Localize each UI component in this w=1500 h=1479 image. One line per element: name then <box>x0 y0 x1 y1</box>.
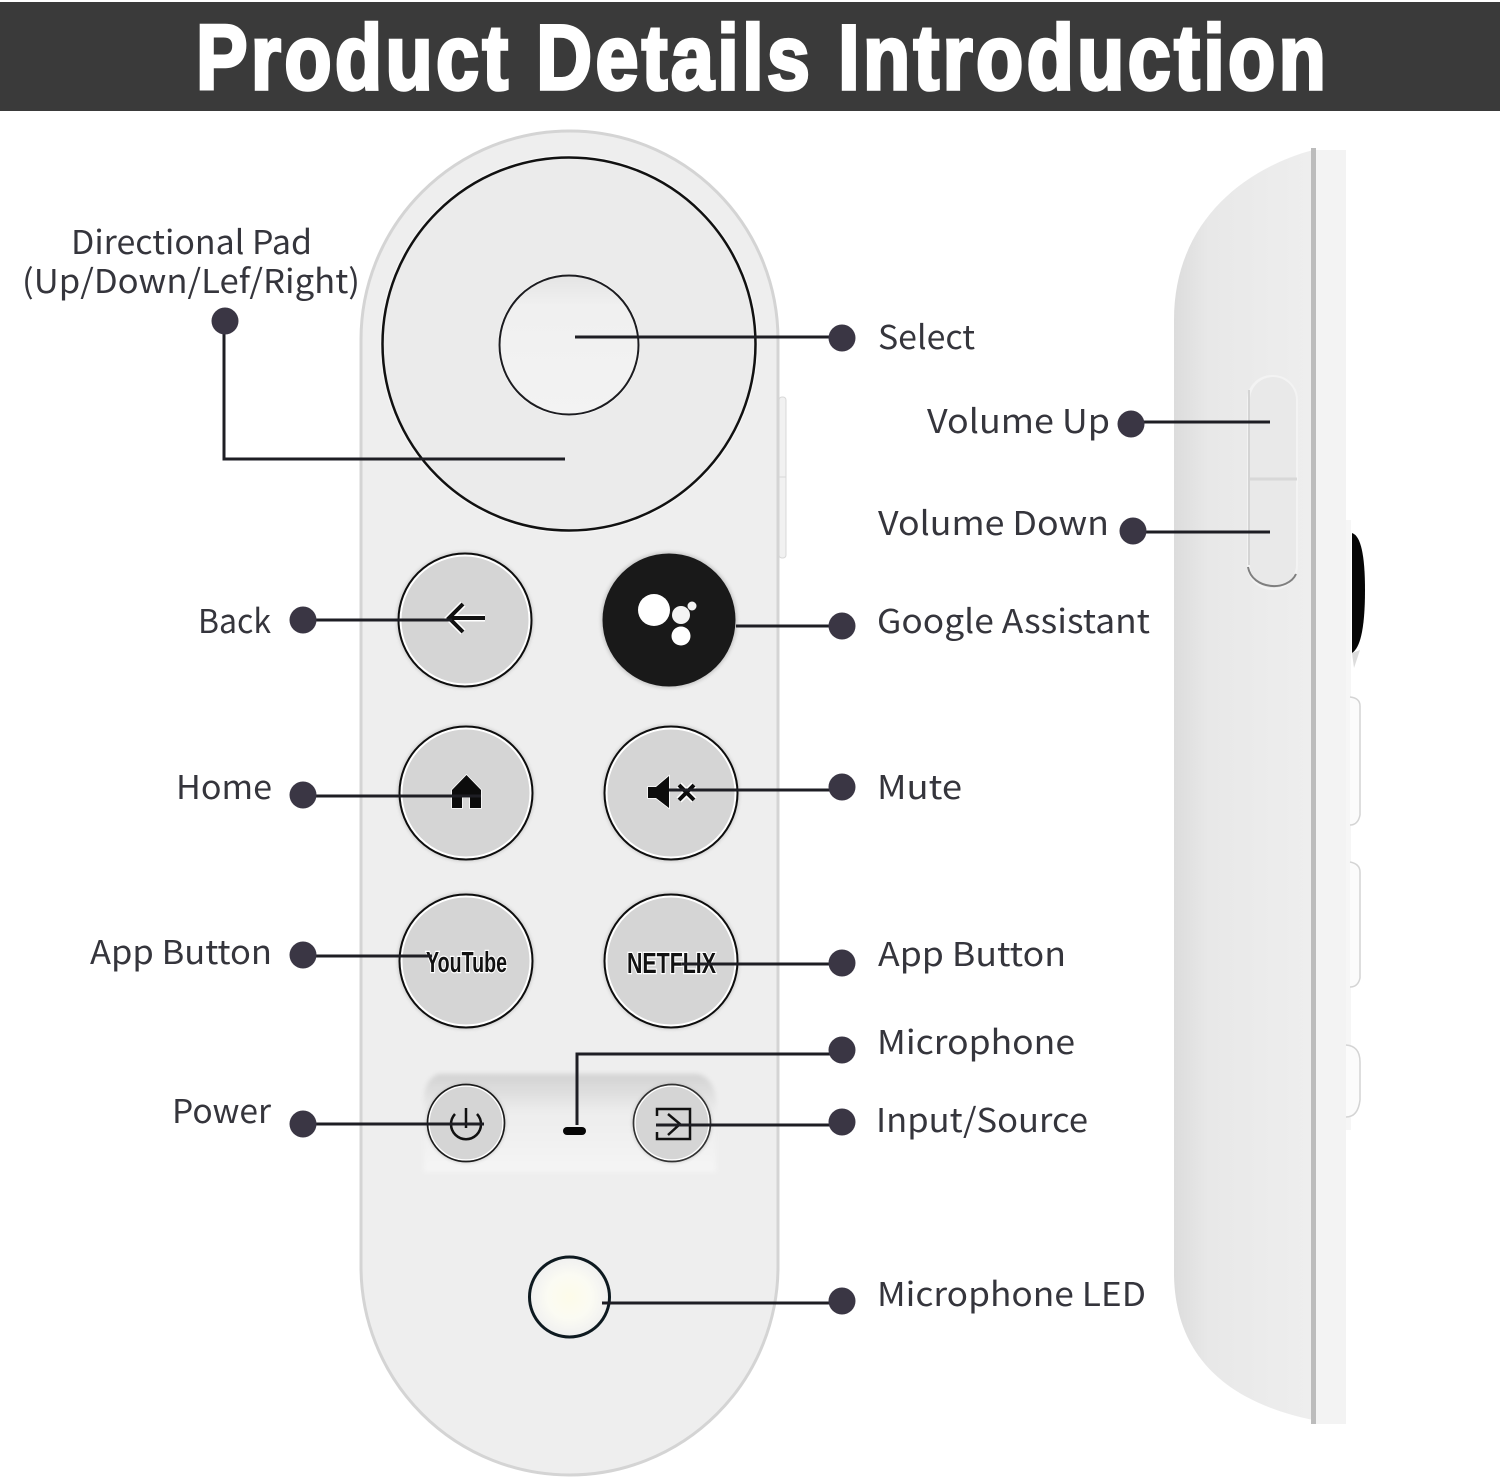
microphone led <box>530 1257 610 1337</box>
back button <box>397 552 533 688</box>
input source button <box>632 1084 712 1162</box>
mute button <box>603 725 739 861</box>
remote side view <box>1174 148 1365 1424</box>
connector: directional pad <box>212 308 565 459</box>
label: select: Select <box>878 311 975 359</box>
label: microphone led: Microphone LED <box>877 1268 1146 1316</box>
label: input source: Input/Source <box>876 1094 1088 1142</box>
label: power: Power <box>172 1085 271 1133</box>
connector: microphone led <box>602 1288 856 1314</box>
youtube button <box>398 893 534 1029</box>
home button <box>398 725 534 861</box>
netflix button <box>603 893 739 1029</box>
connector: input source <box>656 1108 856 1136</box>
power button <box>426 1084 506 1162</box>
connector: volume down <box>1120 518 1270 544</box>
youtube button: YouTube <box>426 947 507 979</box>
label: google assistant: Google Assistant <box>877 595 1150 643</box>
connector: volume up <box>1118 410 1270 438</box>
connector: back <box>290 606 452 634</box>
connector: google assistant <box>736 612 856 640</box>
connector: select <box>575 324 856 352</box>
remote front view <box>361 131 786 1475</box>
label: home: Home <box>176 761 272 809</box>
label: directional pad: (Up/Down/Lef/Right) <box>22 255 360 303</box>
microphone well <box>424 1074 716 1172</box>
label: netflix app button: App Button <box>878 928 1066 976</box>
connector: mute <box>669 774 856 800</box>
select button <box>498 274 640 416</box>
label: youtube app button: App Button <box>90 926 272 974</box>
label: volume down: Volume Down <box>878 497 1109 545</box>
connector: microphone <box>577 1036 856 1125</box>
connector: power <box>290 1110 484 1138</box>
label: directional pad: Directional Pad <box>71 216 312 264</box>
connector: youtube app button <box>290 942 432 968</box>
netflix button: NETFLIX <box>627 948 716 980</box>
label: directional pad <box>22 216 360 303</box>
connector: netflix app button <box>682 950 856 976</box>
label: back: Back <box>198 595 271 643</box>
connector: home <box>290 782 481 808</box>
microphone hole <box>563 1127 586 1135</box>
label: mute: Mute <box>877 761 962 809</box>
volume rocker <box>1247 375 1298 590</box>
label: volume up: Volume Up <box>927 395 1110 443</box>
directional pad <box>380 155 758 533</box>
side google assistant edge <box>1352 533 1365 668</box>
google assistant button <box>601 552 737 688</box>
side button profiles <box>1346 697 1360 1117</box>
label: microphone: Microphone <box>877 1016 1075 1064</box>
title banner: Product Details Introduction <box>196 7 1326 110</box>
